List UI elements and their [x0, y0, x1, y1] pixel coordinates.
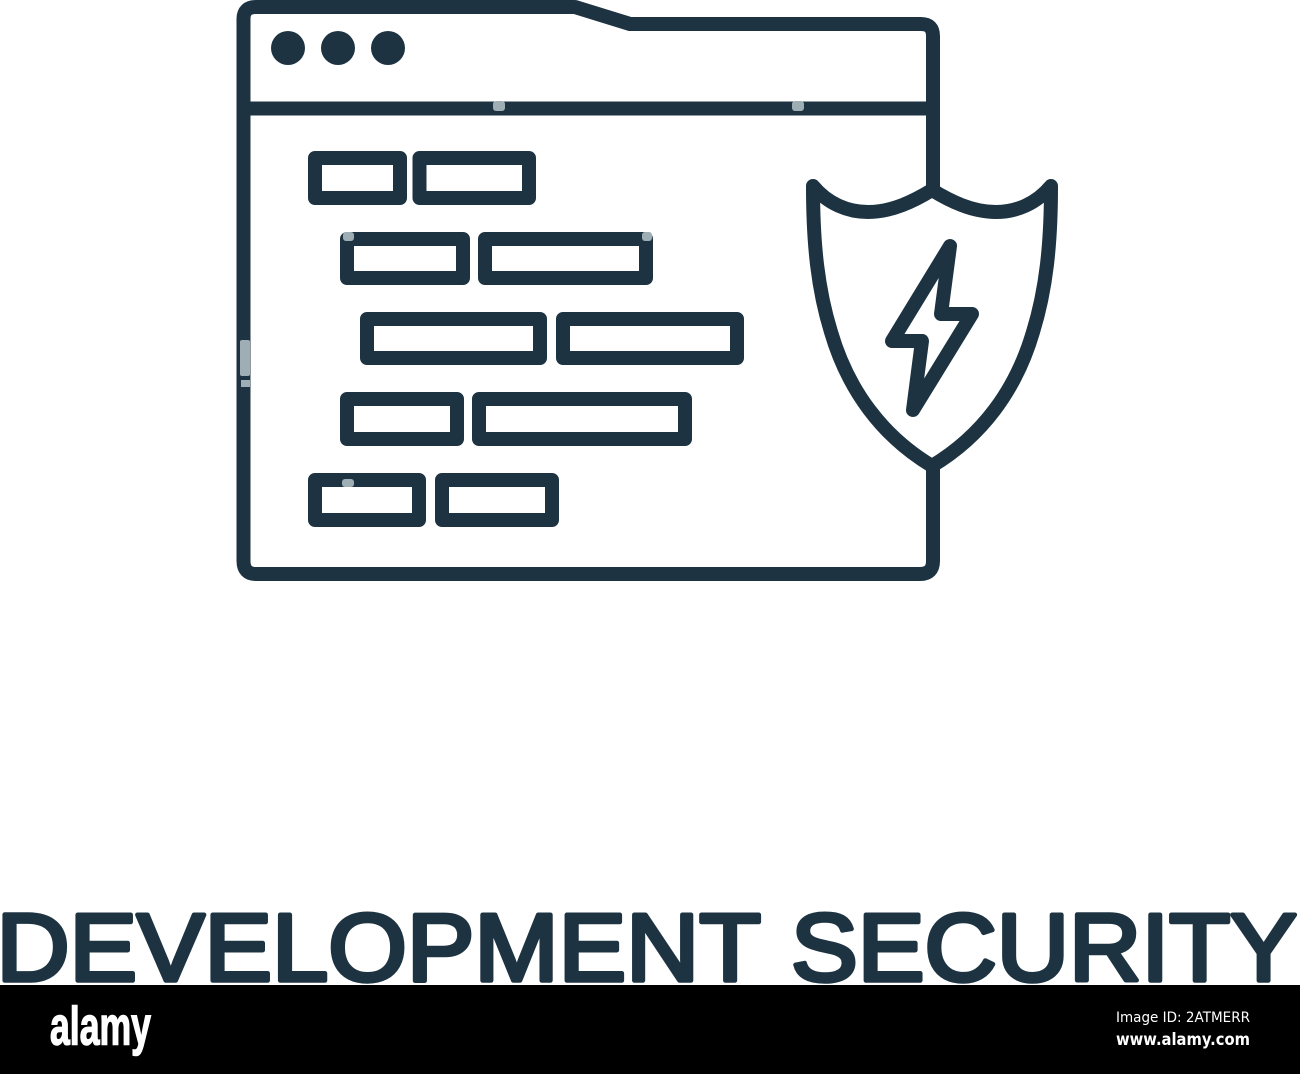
website: www.alamy.com — [1116, 1030, 1250, 1049]
code lines — [315, 158, 737, 520]
title — [0, 894, 1297, 1002]
icon: browser window with code and shield — [244, 7, 1051, 574]
browser title bar divider — [244, 102, 933, 116]
window control dots — [271, 31, 405, 65]
lightning bolt — [892, 246, 972, 410]
title: SECURITY — [791, 894, 1297, 1002]
security shield — [813, 186, 1051, 466]
image id: Image ID: 2ATMERR — [1116, 1010, 1250, 1026]
watermark footer bar — [0, 985, 1300, 1074]
alamy logo: alamy — [50, 996, 151, 1056]
title: DEVELOPMENT — [0, 894, 761, 1002]
browser window frame — [244, 7, 933, 574]
